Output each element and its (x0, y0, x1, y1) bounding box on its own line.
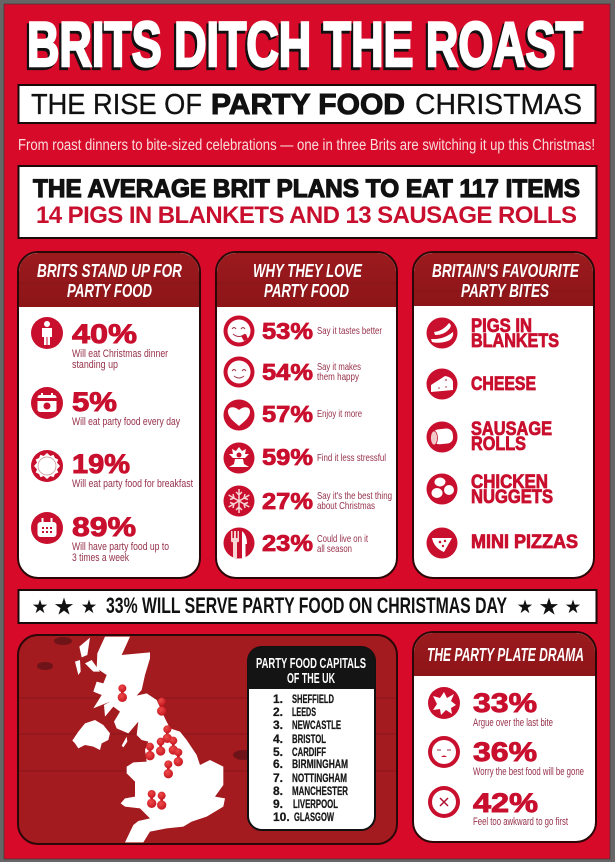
icon: person (31, 317, 63, 349)
ranked city list (273, 692, 348, 824)
stat 23%: 23% (262, 530, 313, 556)
ranked city list: LEEDS (292, 705, 316, 719)
stat 5%: Will eat party food every day (72, 416, 180, 428)
panel header (217, 253, 396, 307)
stat 57% (262, 401, 362, 427)
subtitle banner: THE RISE OF (31, 89, 202, 121)
subtitle banner: PARTY FOOD (211, 89, 405, 121)
stat 59%: 59% (262, 444, 313, 470)
panel header: BRITS STAND UP FOR (37, 260, 182, 281)
icon: cheese (426, 368, 458, 400)
ranked city list: 7. (273, 771, 283, 785)
christmas day banner (18, 590, 596, 623)
stat 54% (262, 359, 361, 385)
stat 27%: Say it's the best thing (317, 490, 392, 502)
stat 33%: 33% (473, 688, 537, 718)
stat 23%: all season (317, 543, 352, 555)
stat 23% (262, 530, 368, 556)
icon: meditating figure (224, 442, 254, 474)
stat 57%: Enjoy it more (317, 408, 362, 420)
ranked city list: NEWCASTLE (292, 718, 341, 732)
stat 40%: 40% (72, 319, 137, 349)
stat 36%: 36% (473, 737, 537, 767)
stat 40%: Will eat Christmas dinner (72, 348, 168, 360)
ranked city list: 2. (273, 705, 283, 719)
headline stat box: 14 PIGS IN BLANKETS AND 13 SAUSAGE ROLLS (36, 202, 577, 229)
ranked city list: CARDIFF (292, 745, 326, 759)
stat 89%: 3 times a week (72, 552, 129, 564)
stat 19%: 19% (72, 449, 130, 479)
icon: pizza slice (426, 528, 458, 558)
icon: calendar check (31, 387, 63, 419)
icon: cross (428, 786, 460, 818)
table header: OF THE UK (287, 671, 335, 687)
table header: PARTY FOOD CAPITALS (256, 656, 366, 672)
label: chicken nuggets: CHICKEN (471, 472, 548, 493)
stat 5% (72, 387, 180, 428)
icon: pigs in blankets (426, 318, 458, 348)
ranked city list: GLASGOW (294, 810, 334, 824)
table header (248, 647, 375, 689)
label: sausage rolls (471, 419, 552, 455)
icon: sad face (428, 736, 460, 768)
ranked city list: BIRMINGHAM (292, 757, 348, 771)
stat 36% (473, 737, 584, 778)
ranked city list: 6. (273, 757, 283, 771)
headline stat box: THE AVERAGE BRIT PLANS TO EAT 117 ITEMS (33, 175, 580, 203)
stat 33%: Argue over the last bite (473, 717, 553, 729)
stat 53%: 53% (262, 318, 313, 344)
panel: brits stand up for party food (18, 252, 200, 578)
headline stat box (18, 166, 596, 238)
stat 19%: Will eat party food for breakfast (72, 478, 193, 490)
stat 59% (262, 444, 386, 470)
stat 27%: 27% (262, 488, 313, 514)
stat 89% (72, 512, 169, 564)
label: pigs in blankets (471, 316, 559, 352)
stat 5%: 5% (72, 387, 117, 417)
panel: britain's favourite party bites (413, 252, 594, 578)
stat 33% (473, 688, 553, 729)
icon: sausage roll (426, 422, 458, 452)
stat 54%: Say it makes (317, 361, 361, 373)
ranked city list: 1. (273, 692, 283, 706)
map pins (118, 684, 183, 810)
label: chicken nuggets (471, 472, 553, 508)
stat 27%: about Christmas (317, 500, 375, 512)
ranked city list: 4. (273, 732, 283, 746)
stat 53%: Say it tastes better (317, 325, 382, 337)
panel header (19, 253, 199, 307)
panel: the party plate drama (413, 632, 596, 842)
stat 27% (262, 488, 392, 514)
label: sausage rolls: ROLLS (471, 434, 526, 455)
stat 54%: them happy (317, 371, 360, 383)
icon: fork and knife (224, 528, 254, 558)
subtitle banner (18, 85, 596, 123)
panel header: PARTY FOOD (67, 280, 152, 301)
stat 89%: Will have party food up to (72, 541, 169, 553)
panel header (414, 253, 593, 306)
stat 42%: Feel too awkward to go first (473, 816, 568, 828)
label: cheese: CHEESE (471, 374, 536, 395)
panel header: PARTY FOOD (264, 280, 349, 301)
ranked city list: MANCHESTER (292, 784, 348, 798)
stat 42% (473, 788, 568, 828)
stat 57%: 57% (262, 401, 313, 427)
stat 54%: 54% (262, 359, 313, 385)
stat 59%: Find it less stressful (317, 452, 386, 464)
stat 89%: 89% (72, 512, 136, 542)
ranked city list: SHEFFIELD (292, 692, 334, 706)
stat 42%: 42% (473, 788, 538, 818)
stars left (33, 598, 96, 615)
ranked city list: BRISTOL (292, 732, 326, 746)
ranked city list: 5. (273, 745, 283, 759)
subtitle banner: CHRISTMAS (415, 89, 582, 121)
label: pigs in blankets: BLANKETS (471, 331, 559, 352)
icon: sun (31, 450, 63, 482)
ranked city list: 3. (273, 718, 283, 732)
stat 40% (72, 319, 168, 371)
panel header: PARTY BITES (461, 280, 549, 301)
stat 40%: standing up (72, 359, 118, 371)
icon: chicken nuggets (426, 474, 458, 504)
party food capitals table (248, 647, 375, 830)
panel header: WHY THEY LOVE (253, 260, 362, 281)
icon: snowflake (224, 486, 254, 516)
ranked city list: NOTTINGHAM (292, 771, 347, 785)
label: pigs in blankets: PIGS IN (471, 316, 532, 337)
panel header (414, 633, 595, 676)
label: mini pizzas: MINI PIZZAS (471, 532, 578, 553)
stat 19% (72, 449, 193, 490)
icon: heart (224, 400, 254, 430)
panel: UK map (18, 635, 397, 844)
icon: smile (224, 356, 254, 388)
panel: why they love party food (216, 252, 397, 578)
label: chicken nuggets: NUGGETS (471, 487, 553, 508)
label: sausage rolls: SAUSAGE (471, 419, 552, 440)
ranked city list: 8. (273, 784, 283, 798)
icon: tongue face (224, 316, 254, 346)
icon: burst (428, 687, 460, 719)
map of the UK (72, 637, 225, 842)
ranked city list: 10. (273, 810, 290, 824)
stat 53% (262, 318, 382, 344)
ranked city list: LIVERPOOL (293, 797, 338, 811)
ranked city list: 9. (273, 797, 283, 811)
icon: calendar (31, 512, 63, 544)
stars right (518, 598, 580, 615)
stat 23%: Could live on it (317, 533, 368, 545)
